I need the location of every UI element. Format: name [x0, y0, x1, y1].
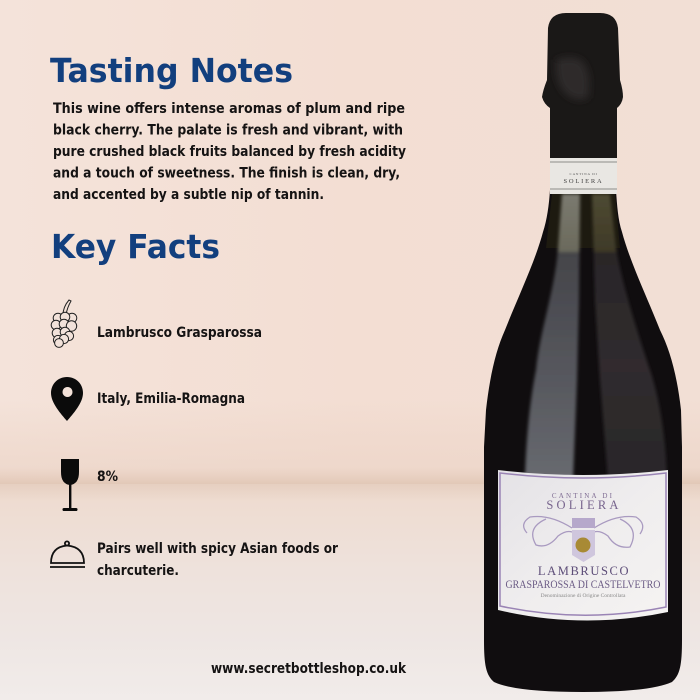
left glass highlight band	[525, 194, 580, 480]
neck label	[550, 158, 617, 194]
right glass highlight band	[592, 194, 667, 480]
bottle	[484, 13, 682, 692]
label: food pairing: charcuterie.	[97, 563, 179, 579]
label: food pairing: Pairs well with spicy Asian foods or	[97, 541, 338, 557]
tasting notes paragraph: This wine offers intense aromas of plum and ripe	[53, 101, 405, 117]
main label: CANTINA DI	[552, 492, 614, 500]
label: food pairing	[97, 541, 338, 579]
main label	[498, 470, 668, 621]
label: alcohol: 8%	[97, 469, 118, 485]
neck label: SOLIERA	[563, 178, 604, 185]
main label: GRASPAROSSA DI CASTELVETRO	[506, 579, 660, 591]
tasting notes paragraph: pure crushed black fruits balanced by fresh acidity	[53, 144, 406, 160]
tasting notes paragraph	[53, 101, 406, 203]
foil capsule	[542, 13, 623, 160]
label: region: Italy, Emilia-Romagna	[97, 391, 245, 407]
olive neck tint	[546, 194, 620, 248]
main label: LAMBRUSCO	[538, 564, 630, 578]
icon: map pin	[51, 377, 83, 421]
icon: wine glass	[61, 459, 79, 511]
label crest and scrollwork	[524, 516, 643, 562]
bottle glass body	[484, 190, 682, 692]
tasting notes paragraph: and accented by a subtle nip of tannin.	[53, 187, 324, 203]
main label: Denominazione di Origine Controllata	[541, 593, 626, 599]
icon: grapes	[51, 300, 77, 347]
heading: Key Facts: Key Facts	[51, 227, 220, 266]
main label: SOLIERA	[546, 498, 622, 512]
neck label: CANTINA DI	[569, 172, 598, 176]
website url: www.secretbottleshop.co.uk	[211, 661, 406, 677]
capsule texture	[556, 57, 589, 100]
icon: food cloche	[50, 541, 85, 567]
tasting notes paragraph: and a touch of sweetness. The finish is clean, dry,	[53, 166, 400, 182]
label: grape variety: Lambrusco Grasparossa	[97, 325, 262, 341]
tasting notes paragraph: black cherry. The palate is fresh and vibrant, with	[53, 122, 403, 138]
heading: Tasting Notes: Tasting Notes	[50, 51, 293, 90]
